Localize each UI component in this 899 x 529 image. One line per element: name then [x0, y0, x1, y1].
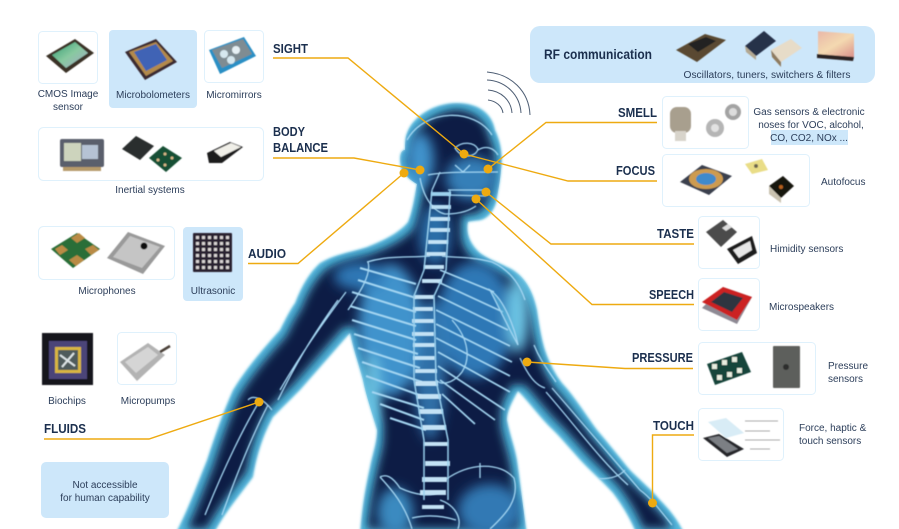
icon: pressure chip — [707, 352, 751, 385]
icon: microphone chips — [51, 232, 165, 274]
heading: FLUIDS: FLUIDS — [44, 421, 86, 436]
legend: not accessible: for human capability — [60, 493, 150, 504]
text: touch sensors: touch sensors — [799, 436, 861, 447]
heading: SPEECH: SPEECH — [649, 287, 694, 302]
panel: smell sensors — [662, 96, 748, 148]
panel: touch sensors — [698, 408, 784, 460]
connector: touch — [648, 435, 694, 508]
text: microspeakers: Microspeakers — [769, 302, 834, 313]
panel: Microbolometers: Microbolometers — [116, 90, 190, 101]
connector: speech — [472, 194, 694, 304]
text: touch sensors: Force, haptic & — [799, 423, 867, 434]
panel: Ultrasonic — [183, 227, 243, 301]
panel: focus sensors — [662, 154, 810, 206]
heading: PRESSURE: PRESSURE — [632, 350, 693, 365]
heading: SMELL: SMELL — [618, 105, 657, 120]
text: pressure sensors: sensors — [828, 374, 863, 385]
heading: TASTE: TASTE — [657, 226, 694, 241]
panel: CMOS image sensor: CMOS Image — [38, 89, 99, 100]
chest glow — [334, 132, 529, 529]
panel: Biochips: Biochips — [48, 396, 86, 407]
text: pressure sensors — [828, 361, 868, 385]
spine — [412, 192, 451, 509]
icon: micropump — [120, 343, 170, 381]
panel: RF communication — [530, 26, 875, 83]
icon: autofocus lens — [680, 165, 732, 195]
connector: sight — [273, 58, 468, 158]
caption: Inertial systems: Inertial systems — [115, 185, 185, 196]
panel: Microbolometers — [109, 30, 197, 108]
connector: smell — [484, 122, 657, 174]
caption: Microphones: Microphones — [78, 286, 136, 297]
panel: taste sensors — [698, 216, 760, 268]
heading: BODY BALANCE: BODY — [273, 124, 305, 139]
panel: Microphones — [38, 226, 174, 280]
icon: autofocus chip small — [745, 159, 768, 174]
heading: RF communication: RF communication — [544, 47, 652, 62]
panel: Inertial systems — [38, 128, 264, 180]
icon: filter chip — [817, 31, 854, 61]
icon: CMOS chip — [46, 39, 94, 73]
panel: CMOS image sensor — [38, 32, 99, 113]
panel: speech sensors — [698, 278, 760, 330]
text: pressure sensors: Pressure — [828, 361, 868, 372]
connector: taste — [482, 188, 694, 244]
icon: microbolometer chip — [125, 39, 177, 80]
icon: micromirror chip — [209, 37, 256, 74]
icon: ultrasonic array — [193, 233, 232, 272]
panel: Micropumps: Micropumps — [121, 396, 175, 407]
connector: audio — [248, 168, 408, 264]
legend: not accessible — [41, 462, 169, 518]
connector: pressure — [522, 358, 693, 368]
icon: wireless signal arcs — [487, 72, 530, 115]
connector: fluids — [44, 398, 264, 439]
icon: tuner chips — [745, 31, 802, 67]
icon: gas sensor — [670, 107, 691, 141]
text: gas sensors: noses for VOC, alcohol, — [758, 120, 864, 131]
text: touch sensors — [799, 423, 867, 447]
icon: electronic nose — [706, 104, 741, 137]
legend: not accessible: Not accessible — [72, 480, 138, 491]
icon: oscillator — [676, 34, 726, 62]
text: humidity sensors: Himidity sensors — [770, 244, 843, 255]
icon: humidity sensor — [706, 220, 757, 264]
panel: Ultrasonic: Ultrasonic — [191, 286, 235, 297]
panel: pressure sensors — [698, 342, 816, 394]
icon: touch device — [703, 418, 780, 457]
panel: Micromirrors — [204, 30, 264, 101]
connector: body balance — [273, 158, 424, 174]
heading: AUDIO: AUDIO — [248, 246, 286, 261]
skeleton — [205, 115, 672, 529]
icon: inertial chips — [122, 136, 182, 172]
caption: RF components: Oscillators, tuners, switchers & filters — [684, 70, 850, 81]
icon: microspeaker — [702, 287, 752, 324]
heading: TOUCH: TOUCH — [653, 418, 694, 433]
panel: Micromirrors: Micromirrors — [206, 90, 262, 101]
panel: Biochips — [42, 333, 93, 407]
connector: focus — [464, 154, 657, 181]
text: gas sensors — [753, 107, 865, 145]
icon: autofocus module — [769, 176, 794, 203]
heading: FOCUS: FOCUS — [616, 163, 655, 178]
icon: inertial module — [60, 139, 104, 171]
human body x-ray figure — [175, 103, 685, 529]
icon: pressure package — [773, 346, 800, 388]
panel: CMOS image sensor: sensor — [53, 102, 84, 113]
heading: BODY BALANCE second line: BALANCE — [273, 140, 328, 155]
panel: Micropumps — [118, 332, 176, 407]
text: gas sensors: Gas sensors & electronic — [753, 107, 865, 118]
text: gas sensors: CO, CO2, NOx ... — [770, 133, 848, 144]
text: autofocus: Autofocus — [821, 177, 865, 188]
heading: SIGHT: SIGHT — [273, 41, 308, 56]
icon: inertial package — [207, 142, 243, 163]
